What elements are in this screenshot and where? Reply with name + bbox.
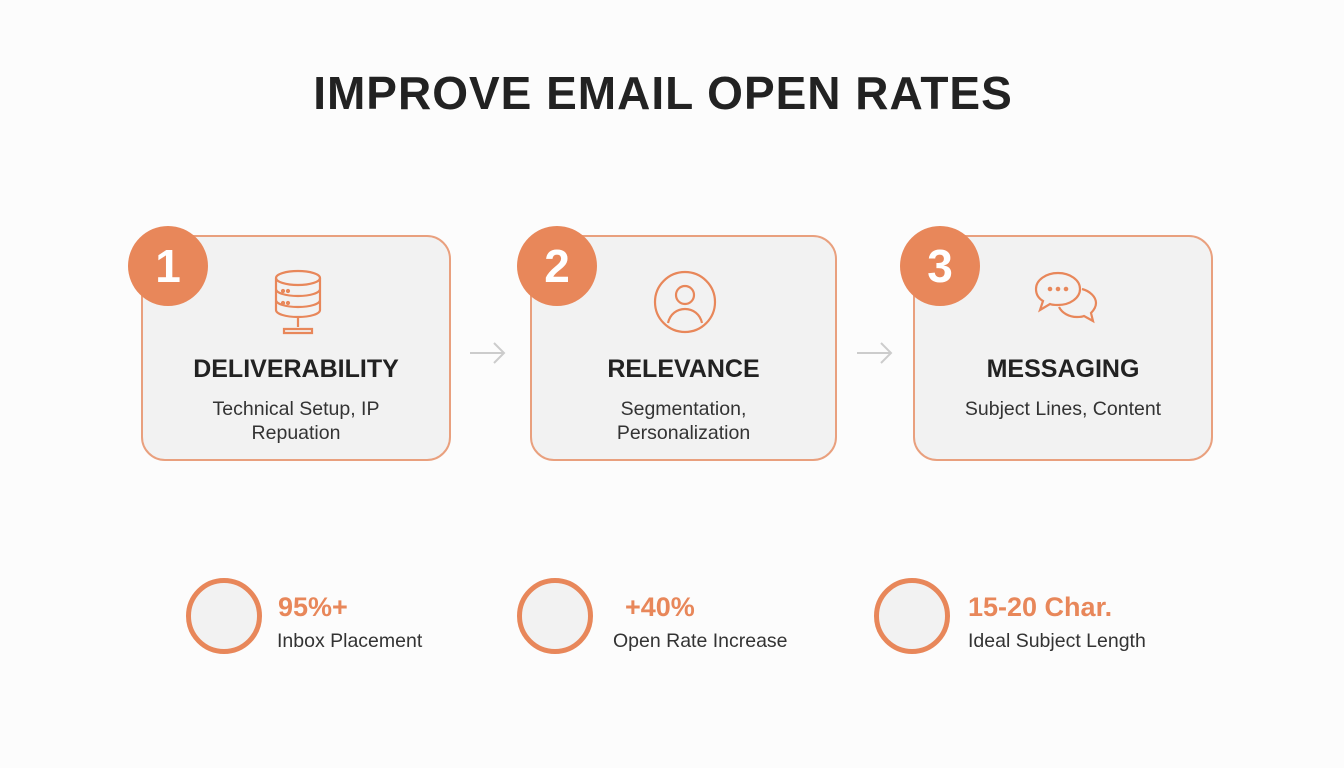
text: Subject Lines, Content bbox=[965, 398, 1161, 420]
icon: chat bubbles bbox=[1034, 272, 1098, 324]
heading: DELIVERABILITY bbox=[193, 355, 399, 383]
panel: messaging bbox=[913, 235, 1213, 461]
stat 2: +40% bbox=[625, 592, 695, 622]
stat 1 bbox=[186, 578, 422, 654]
badge 1: 1 bbox=[155, 240, 181, 292]
badge 1 bbox=[128, 226, 208, 306]
text: Segmentation, bbox=[621, 398, 746, 420]
panel: deliverability bbox=[141, 235, 451, 461]
text: Repuation bbox=[252, 422, 340, 444]
text: Personalization bbox=[617, 422, 750, 444]
stat 3: 15-20 Char. bbox=[968, 592, 1112, 622]
stat 3: Ideal Subject Length bbox=[968, 630, 1146, 652]
icon: user bbox=[654, 270, 716, 334]
stat 3 bbox=[874, 578, 1146, 654]
icon: database bbox=[274, 270, 322, 334]
heading: RELEVANCE bbox=[607, 355, 760, 383]
stat 2: Open Rate Increase bbox=[613, 630, 788, 652]
text bbox=[212, 398, 379, 444]
stat 2 bbox=[517, 578, 788, 654]
text: Technical Setup, IP bbox=[213, 398, 379, 420]
title: IMPROVE EMAIL OPEN RATES bbox=[313, 67, 1013, 119]
arrow 2 bbox=[857, 342, 892, 364]
badge 3 bbox=[900, 226, 980, 306]
arrow 1 bbox=[470, 342, 506, 364]
text bbox=[617, 398, 750, 444]
heading: MESSAGING bbox=[987, 355, 1139, 383]
stat 1: 95%+ bbox=[278, 592, 348, 622]
stat 1: Inbox Placement bbox=[277, 630, 422, 652]
badge 3: 3 bbox=[927, 240, 953, 292]
badge 2 bbox=[517, 226, 597, 306]
badge 2: 2 bbox=[544, 240, 570, 292]
panel: relevance bbox=[530, 235, 837, 461]
